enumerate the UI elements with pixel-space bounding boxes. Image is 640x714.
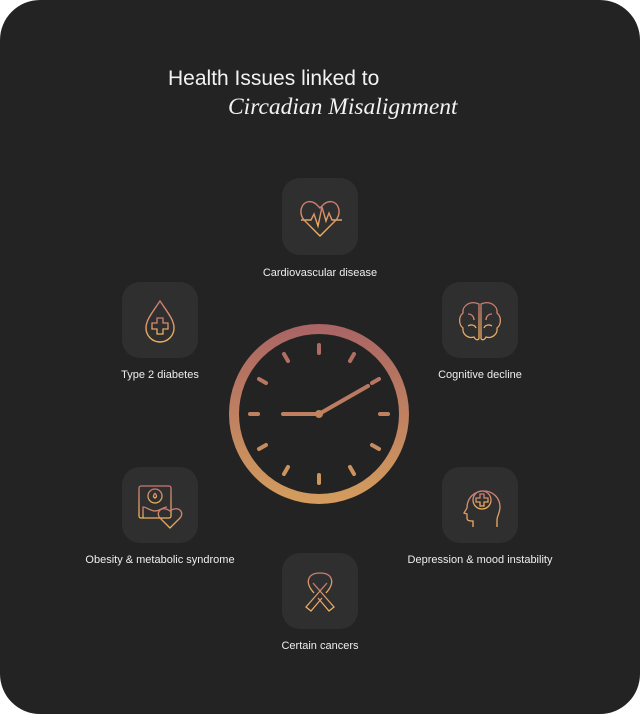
title: Circadian Misalignment	[228, 94, 458, 120]
title: Health Issues linked to	[168, 67, 379, 90]
tile: cognitive	[438, 282, 522, 381]
tile: cardiovascular: Cardiovascular disease	[263, 267, 377, 279]
tile: cognitive: Cognitive decline	[438, 369, 522, 381]
tile: depression	[408, 467, 553, 566]
tile: cancers	[281, 553, 359, 652]
tile: diabetes	[121, 282, 199, 381]
tile: diabetes: Type 2 diabetes	[121, 369, 199, 381]
tile: cancers: Certain cancers	[281, 640, 359, 652]
tile: cardiovascular	[263, 178, 377, 279]
tile: depression: Depression & mood instability	[408, 554, 553, 566]
clock	[234, 329, 404, 499]
tile: obesity: Obesity & metabolic syndrome	[85, 554, 235, 566]
tile: obesity	[85, 467, 235, 566]
title	[168, 67, 458, 120]
